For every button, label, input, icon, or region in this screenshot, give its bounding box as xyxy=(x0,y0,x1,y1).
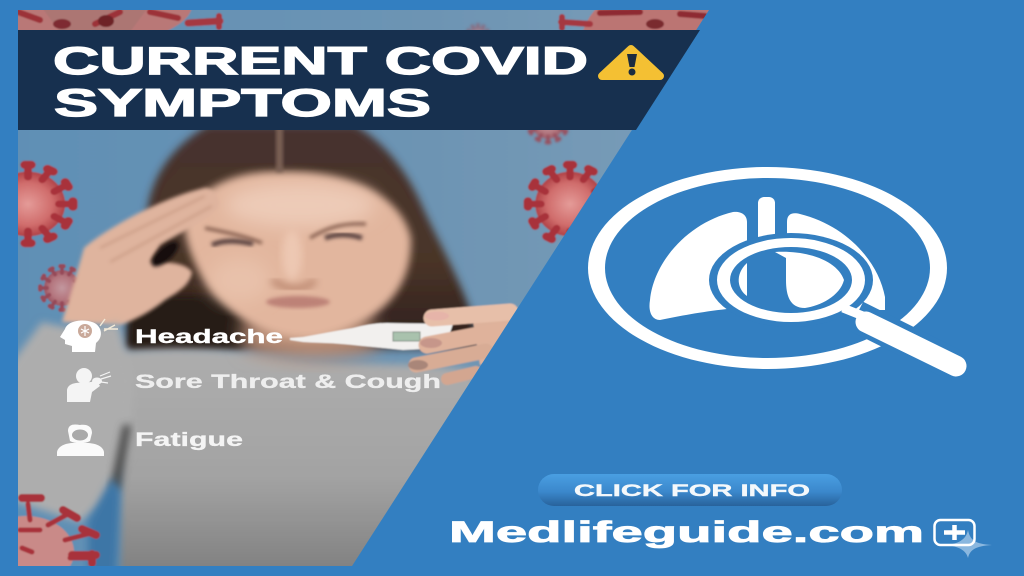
lens: left lung sliver xyxy=(739,263,747,296)
magnifier lens xyxy=(730,247,852,313)
finger ridges xyxy=(100,196,212,262)
bottom-left virus xyxy=(18,493,101,566)
lens: right lung section xyxy=(775,252,844,308)
face xyxy=(184,172,411,339)
icon: lungs under magnifying glass xyxy=(588,167,958,369)
outer ring xyxy=(588,167,947,369)
icon: tired person xyxy=(57,425,104,456)
button label: CLICK FOR INFO xyxy=(574,481,810,500)
nose shadow xyxy=(272,280,315,288)
virus: faint below banner xyxy=(526,130,570,146)
eyes xyxy=(212,235,362,245)
label: Sore Throat & Cough xyxy=(135,372,441,393)
eyebrows xyxy=(205,224,366,243)
raised hand xyxy=(62,188,219,325)
virus: right xyxy=(528,165,612,243)
virus: faint top centre xyxy=(466,22,490,30)
photo panel: woman with headache and thermometer xyxy=(0,5,720,576)
virus cluster: top left xyxy=(18,10,224,30)
neck xyxy=(240,318,380,360)
virus cluster: top right xyxy=(557,10,709,30)
handle grip xyxy=(866,322,956,366)
hair xyxy=(125,125,480,350)
nose bridge highlight xyxy=(282,230,302,280)
magnifier rim xyxy=(717,238,865,322)
title banner xyxy=(18,30,700,130)
icon: plus box xyxy=(934,520,974,545)
magnifier halo xyxy=(709,233,873,327)
symptom: sore throat and cough xyxy=(67,368,441,402)
forehead highlight xyxy=(225,183,375,227)
handle neck xyxy=(843,308,868,318)
label: Fatigue xyxy=(135,430,243,451)
button: click for info xyxy=(538,474,842,506)
title: CURRENT COVID xyxy=(53,40,588,83)
lower-left hair shadow xyxy=(128,295,243,350)
symptom: headache xyxy=(60,319,283,352)
mouth xyxy=(266,296,330,308)
hair parting xyxy=(276,126,283,172)
photo backdrop xyxy=(18,10,632,566)
thermometer xyxy=(290,323,453,350)
left lung xyxy=(649,212,747,320)
sweater torso xyxy=(118,342,472,566)
photo contents xyxy=(0,5,720,576)
website name: Medlifeguide.com xyxy=(449,516,924,549)
arm-body shadow xyxy=(110,425,131,490)
virus: faint left behind hand xyxy=(40,266,84,310)
gap between hand and head xyxy=(148,239,180,270)
holding hand xyxy=(408,312,520,379)
symptom: fatigue xyxy=(57,425,243,456)
thermometer display xyxy=(393,332,420,341)
trachea xyxy=(758,197,775,238)
right lung xyxy=(787,213,885,310)
cheek highlight xyxy=(210,258,270,302)
blue gap under arm xyxy=(88,478,120,575)
handle halo xyxy=(856,316,958,367)
icon: sparkle xyxy=(945,530,992,558)
title xyxy=(53,40,588,125)
label: Headache xyxy=(135,327,283,348)
virus: left xyxy=(0,165,73,243)
title: SYMPTOMS xyxy=(54,82,431,125)
icon: head with pain star xyxy=(60,319,118,352)
icon: coughing person xyxy=(67,368,111,402)
icon: warning triangle xyxy=(602,49,660,76)
sweater sleeve xyxy=(10,322,134,522)
